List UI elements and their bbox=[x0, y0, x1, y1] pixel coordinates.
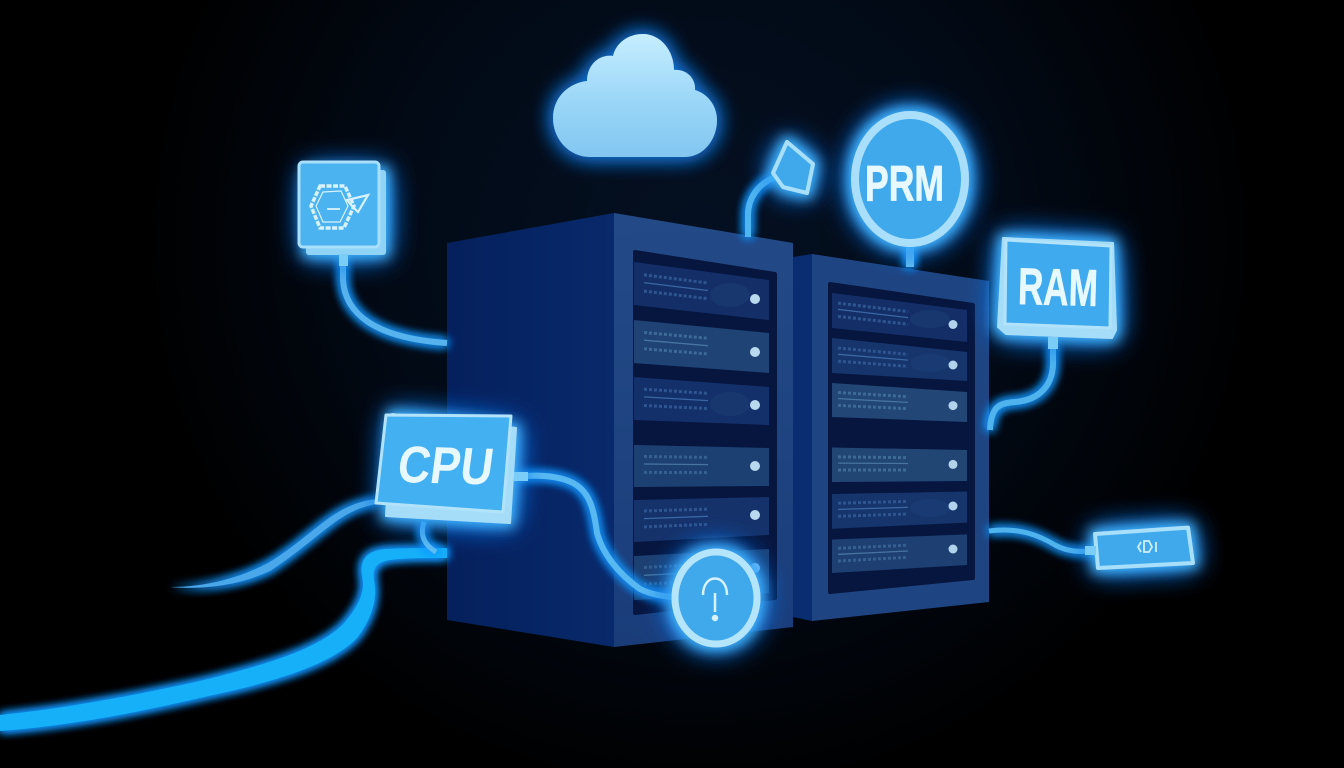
right rack unit 2 bbox=[832, 338, 967, 381]
right rack unit 4 bbox=[832, 448, 967, 482]
cable: RAM to server bbox=[990, 343, 1053, 430]
CPU card: CPU bbox=[394, 436, 497, 496]
left rack unit 6 bbox=[634, 549, 769, 600]
left rack unit 5 bbox=[634, 497, 769, 542]
cable: pentagon to server bbox=[748, 177, 775, 237]
right rack unit 3 bbox=[832, 383, 967, 422]
PRM badge bbox=[855, 115, 965, 243]
top left chip card bbox=[299, 162, 386, 266]
PRM stem bbox=[906, 245, 914, 267]
device connector bbox=[1085, 546, 1096, 555]
icon: hexagon chip bbox=[311, 186, 368, 228]
PRM badge: PRM bbox=[865, 156, 944, 212]
USB device bbox=[1085, 528, 1193, 568]
left rack unit 4 bbox=[634, 445, 769, 487]
cable: top left card to server bbox=[343, 257, 447, 343]
right server rack bbox=[793, 254, 989, 621]
left rack unit 3 bbox=[634, 377, 769, 425]
CPU card bbox=[376, 414, 528, 523]
icon: exclamation bbox=[703, 578, 727, 620]
right rack unit 1 bbox=[832, 293, 967, 342]
long cable bottom left bbox=[0, 548, 447, 731]
device icon bbox=[1138, 541, 1156, 552]
icon: pentagon tag bbox=[773, 142, 813, 193]
cable: CPU to alert circle bbox=[515, 476, 672, 597]
left server rack bbox=[447, 213, 793, 647]
icon: cloud bbox=[553, 34, 717, 157]
RAM card: RAM bbox=[1017, 258, 1099, 318]
right rack unit 6 bbox=[832, 534, 967, 573]
RAM card bbox=[998, 238, 1116, 349]
cable: server to device bbox=[989, 530, 1098, 551]
alert circle bbox=[675, 552, 757, 644]
left rack unit 2 bbox=[634, 320, 769, 373]
CPU connector bbox=[514, 472, 528, 481]
left rack unit 1 bbox=[634, 262, 769, 320]
chip card connector bbox=[339, 254, 348, 266]
right rack unit 5 bbox=[832, 492, 967, 529]
small CPU loop cable bbox=[422, 522, 436, 552]
thin cable to CPU bbox=[170, 499, 378, 588]
RAM connector bbox=[1048, 337, 1058, 349]
